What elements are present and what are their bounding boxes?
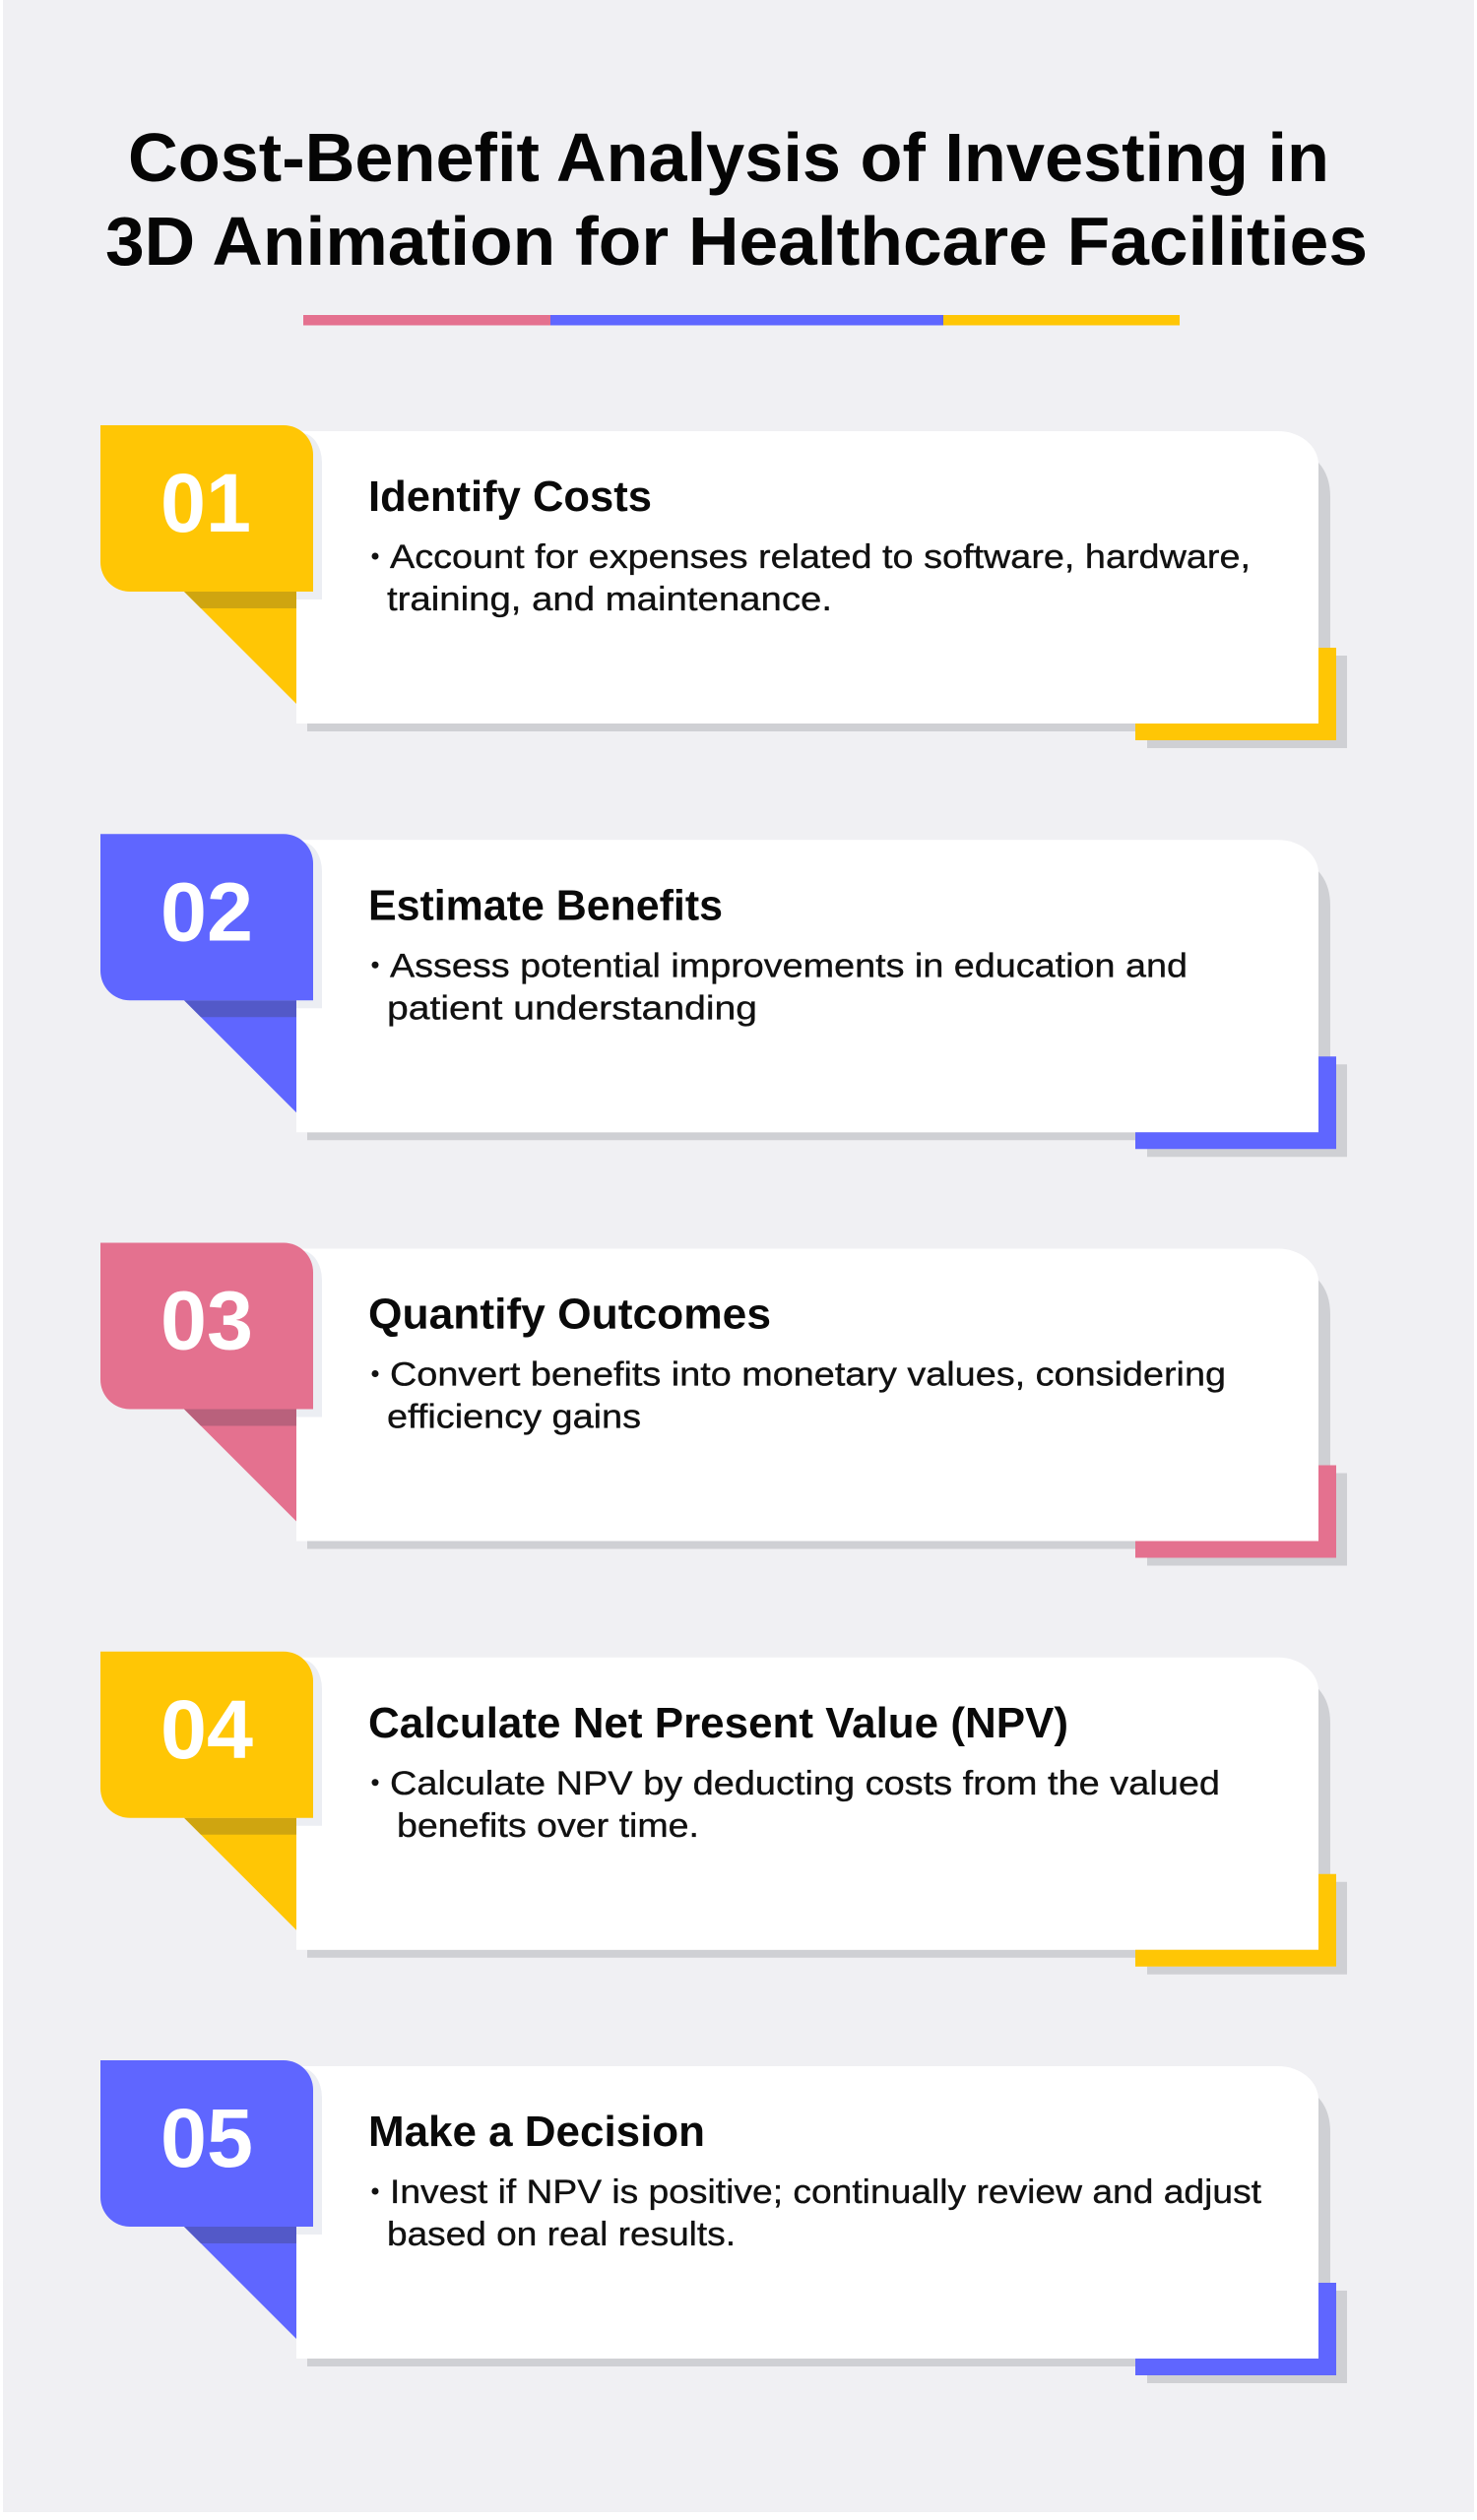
step description [387, 538, 1251, 618]
corner bracket shadow [1147, 2291, 1347, 2383]
badge soft shadow [296, 2068, 322, 2235]
corner bracket shadow [1147, 1473, 1347, 1565]
step number: 01 [161, 457, 251, 549]
corner bracket [1135, 1465, 1336, 1557]
bullet dot [372, 962, 378, 969]
white card [296, 840, 1318, 1132]
card shadow [307, 1689, 1330, 1958]
step heading: Make a Decision [368, 2108, 705, 2156]
bullet dot [372, 2187, 378, 2195]
badge tail [184, 1410, 296, 1522]
bullet dot [372, 1779, 378, 1786]
bullet dot [372, 553, 378, 559]
panel: step 01 Identify Costs [100, 425, 1347, 748]
title: 3D Animation for Healthcare Facilities [105, 203, 1368, 280]
white card [296, 1658, 1318, 1950]
step description: efficiency gains [387, 1398, 641, 1435]
step description: based on real results. [387, 2216, 736, 2253]
step description: benefits over time. [397, 1807, 699, 1845]
number badge [100, 1242, 313, 1410]
badge tail [184, 592, 296, 704]
tail shade [184, 1000, 296, 1017]
corner bracket [1135, 1874, 1336, 1967]
step heading: Identify Costs [368, 472, 652, 521]
step description [387, 947, 1188, 1027]
card shadow [307, 871, 1330, 1140]
badge soft shadow [296, 433, 322, 599]
step description: Convert benefits into monetary values, considering [390, 1356, 1226, 1394]
card shadow [307, 1280, 1330, 1549]
step description: Calculate NPV by deducting costs from the valued [390, 1765, 1220, 1802]
step number: 05 [161, 2092, 253, 2184]
panel: step 05 Make a Decision [100, 2060, 1347, 2383]
badge tail [184, 1818, 296, 1930]
bullet dot [372, 1370, 378, 1377]
step description: Assess potential improvements in education and [390, 947, 1188, 984]
title underline: three colours [303, 315, 1180, 325]
number badge [100, 425, 313, 592]
step heading: Calculate Net Present Value (NPV) [368, 1699, 1068, 1747]
corner bracket shadow [1147, 656, 1347, 748]
number badge [100, 1652, 313, 1818]
step heading: Estimate Benefits [368, 881, 723, 929]
white card [296, 2066, 1318, 2359]
corner bracket shadow [1147, 1064, 1347, 1157]
tail shade [184, 1818, 296, 1835]
badge soft shadow [296, 842, 322, 1008]
title [105, 119, 1368, 280]
step description: patient understanding [387, 989, 757, 1027]
number badge [100, 834, 313, 1000]
corner bracket shadow [1147, 1882, 1347, 1975]
card shadow [307, 2098, 1330, 2366]
white card [296, 431, 1318, 724]
panel: step 02 Estimate Benefits [100, 834, 1347, 1157]
corner bracket [1135, 648, 1336, 740]
step number: 04 [161, 1683, 253, 1776]
corner bracket [1135, 2283, 1336, 2375]
badge tail [184, 1000, 296, 1112]
number badge [100, 2060, 313, 2227]
step number: 03 [161, 1274, 253, 1366]
step description [387, 1356, 1226, 1435]
step description: training, and maintenance. [387, 581, 832, 618]
badge tail [184, 2227, 296, 2339]
badge soft shadow [296, 1660, 322, 1826]
tail shade [184, 1410, 296, 1425]
step number: 02 [161, 865, 253, 958]
card shadow [307, 463, 1330, 731]
panel: step 04 Calculate Net Present Value [100, 1652, 1347, 1975]
step description [390, 1765, 1220, 1845]
panel: step 03 Quantify Outcomes [100, 1242, 1347, 1565]
step description: Invest if NPV is positive; continually review and adjust [390, 2174, 1262, 2211]
tail shade [184, 592, 296, 608]
white card [296, 1248, 1318, 1542]
tail shade [184, 2227, 296, 2243]
title: Cost-Benefit Analysis of Investing in [128, 119, 1329, 196]
badge soft shadow [296, 1250, 322, 1418]
step heading: Quantify Outcomes [368, 1290, 771, 1339]
corner bracket [1135, 1056, 1336, 1149]
step description: Account for expenses related to software, hardware, [390, 538, 1251, 576]
step description [387, 2174, 1262, 2253]
